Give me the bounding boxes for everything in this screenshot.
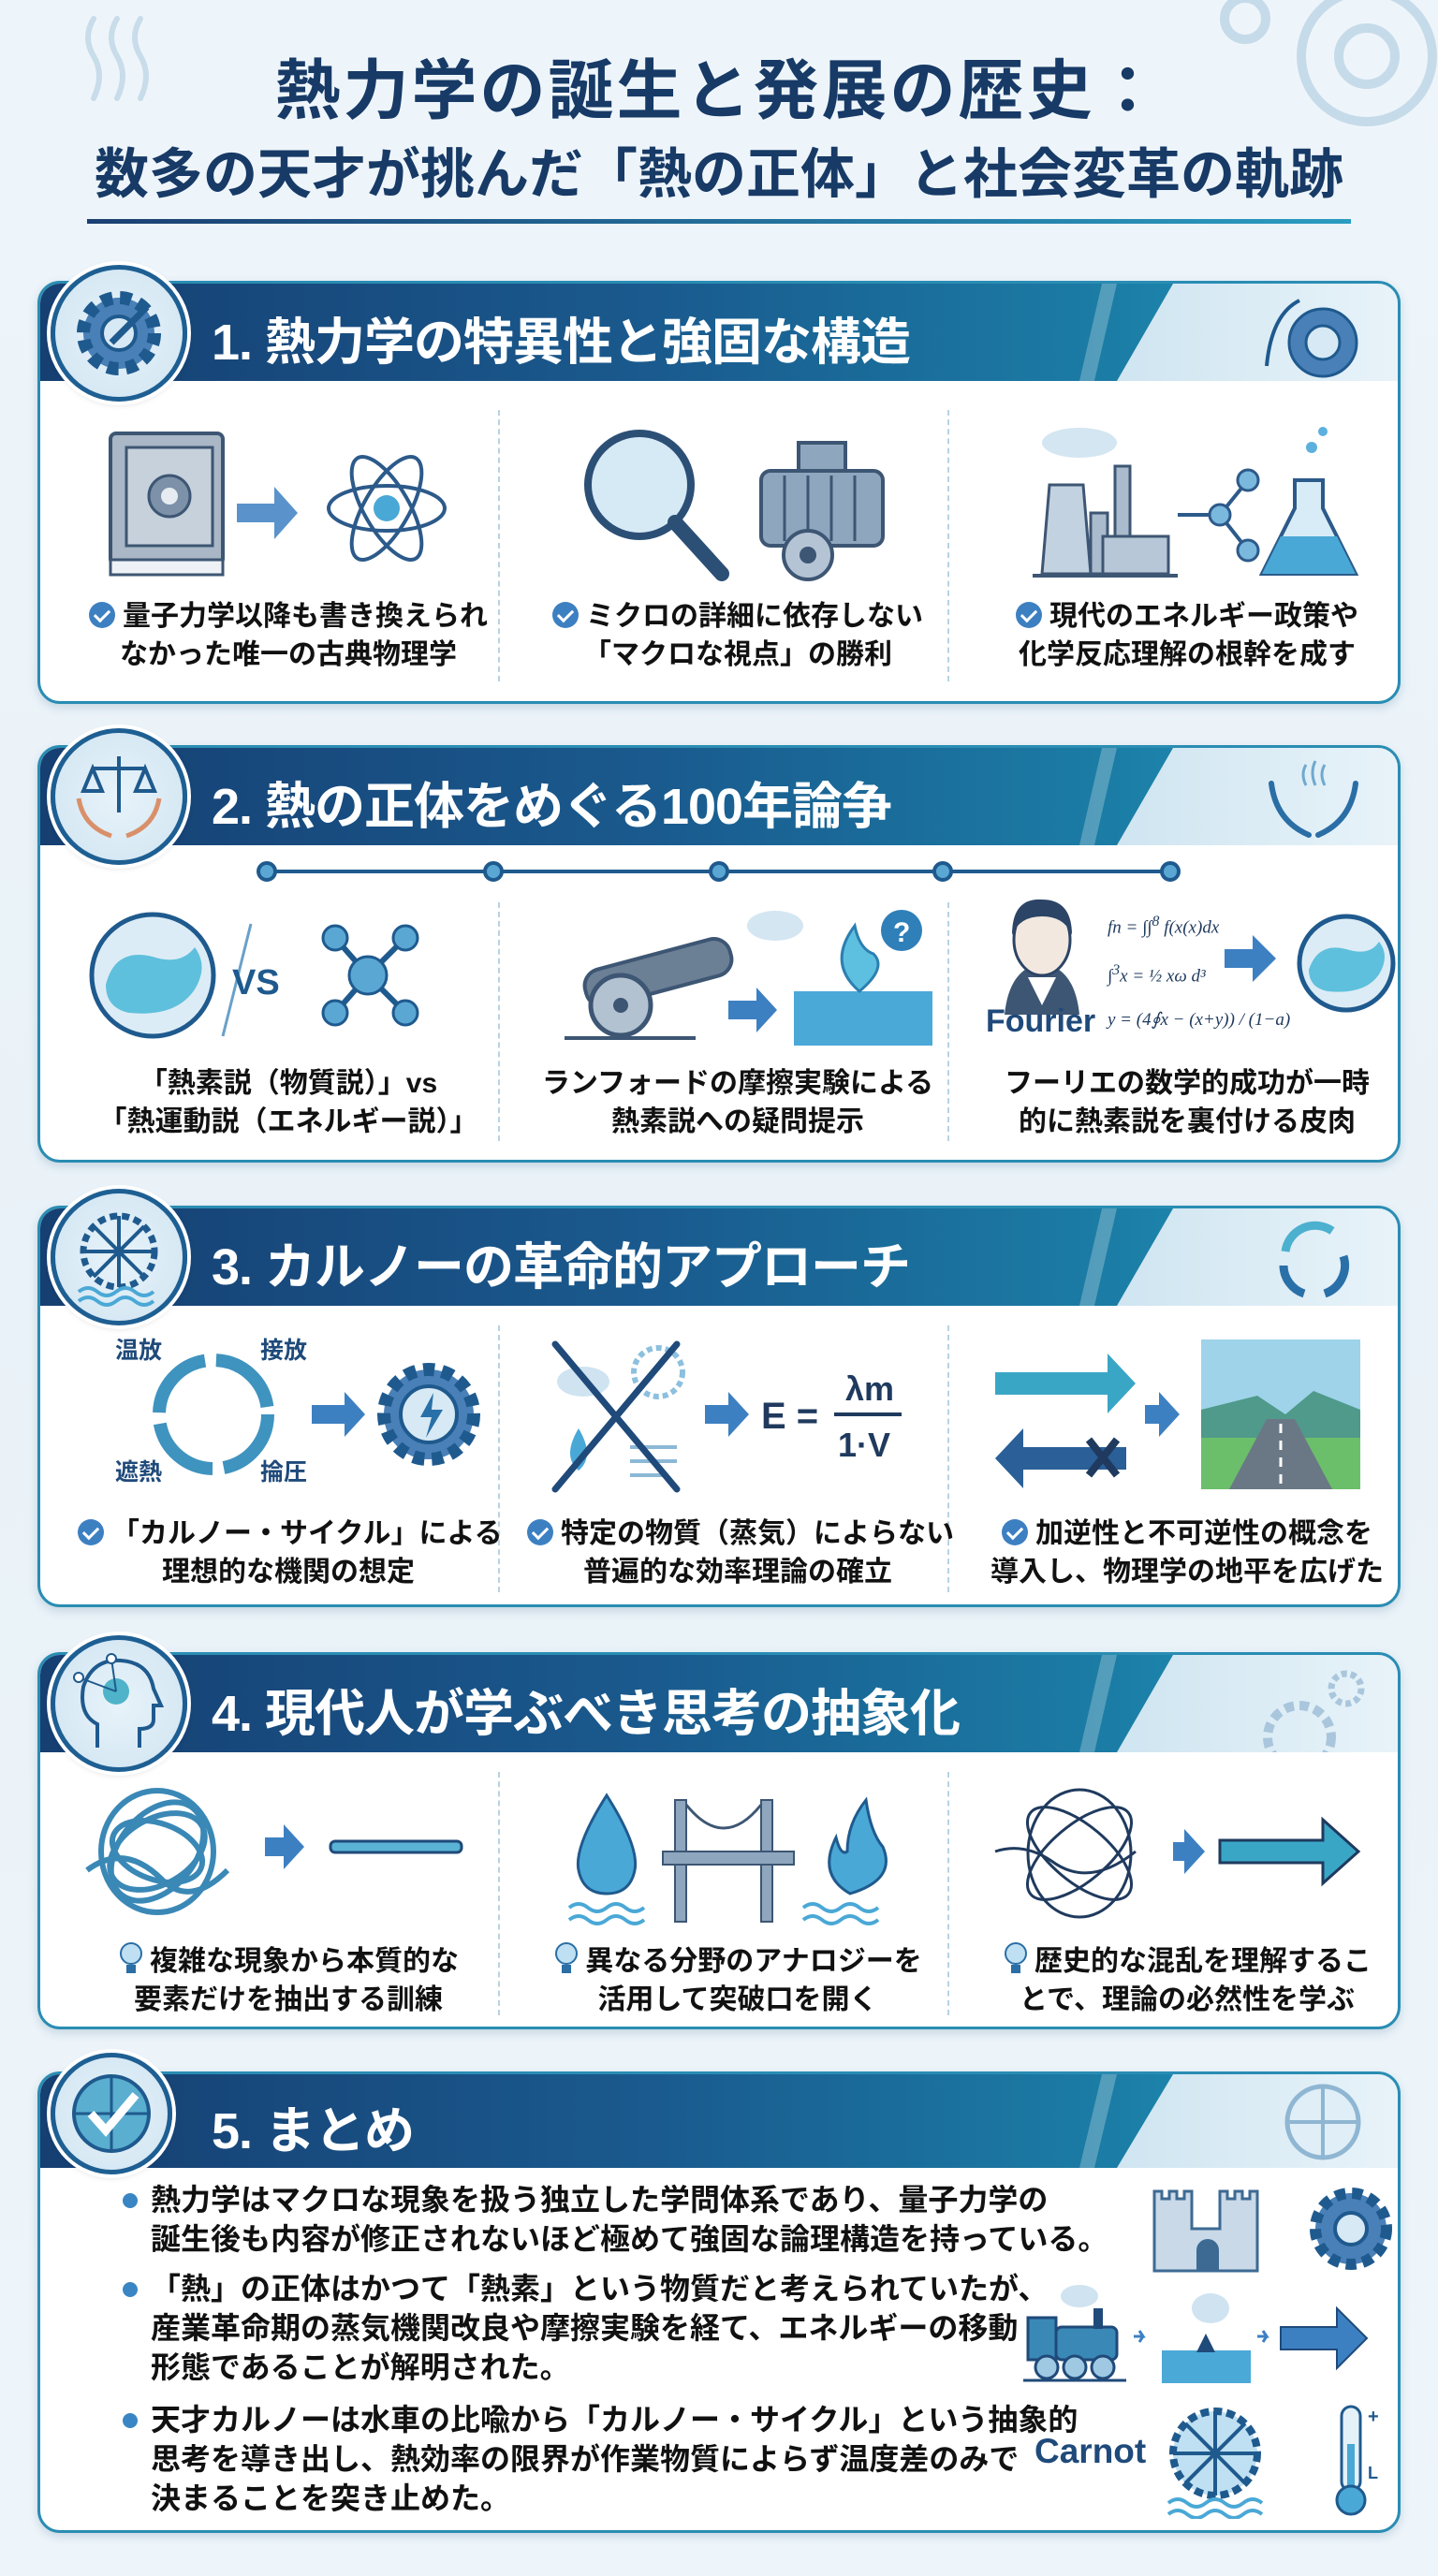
timeline [257,861,1181,882]
header 1: 1. 熱力学の特異性と強固な構造 [212,315,910,371]
col3 text [1005,1942,1372,2015]
title: 熱力学の誕生と発展の歴史： [275,54,1163,127]
col1 text [89,601,488,670]
panel 2 [37,745,1401,1163]
col3 icons: Fourier, formulas, caloric: fn = ∫∫8 f(x(x)dx [1108,914,1219,937]
col2 text [552,601,923,670]
header 2 [40,748,1398,845]
title: 数多の天才が挑んだ「熱の正体」と社会変革の軌跡 [95,144,1343,205]
col1 text: 量子力学以降も書き換えられ [123,601,488,632]
col3 text: 化学反応理解の根幹を成す [1019,639,1356,670]
col3 text [1016,601,1358,670]
panel 3 [37,1206,1401,1607]
icon: panel 3 waterwheel circle [51,1189,187,1325]
col1 text [78,1518,503,1588]
title underline [87,219,1351,224]
col2 text: 異なる分野のアナロジーを [585,1946,922,1977]
col1 icons: book -> atom [109,432,447,577]
col2 text: ミクロの詳細に依存しない [586,601,923,632]
col2 icons: cannon, fire, water [565,910,932,1046]
col3 icons: Fourier, formulas, caloric: y = (4∮x − (x+y)) / (1−a) [1108,1010,1290,1030]
col1 text: 複雑な現象から本質的な [150,1946,459,1977]
bullet 3: 思考を導き出し、熱効率の限界が作業物質によらず温度差のみで [151,2442,1019,2476]
col1 icons: caloric vs molecule [90,912,419,1039]
col3 icons: reversible arrows -> road landscape [995,1339,1360,1489]
bullet 2: 形態であることが解明された。 [151,2350,570,2384]
icon: puzzle circle (deco) [1284,2084,1361,2160]
bullet 3: 天才カルノーは水車の比喩から「カルノー・サイクル」という抽象的 [151,2403,1078,2437]
col3 icons: Fourier, formulas, caloric: Fourier [986,1003,1095,1039]
col1 text [120,1942,459,2015]
bullet 1: 熱力学はマクロな現象を扱う独立した学問体系であり、量子力学の [151,2183,1048,2217]
background decoration: gears [1220,0,1437,126]
col3 text: 的に熱素説を裏付ける皮肉 [1019,1106,1356,1137]
icons: castle and gear [1153,2188,1392,2273]
col1 icons: tangle -> line [85,1788,462,1915]
col3 text [990,1518,1384,1588]
col1 text [99,1068,477,1137]
icons: waterwheel and thermometer [1167,2406,1379,2519]
col3 icons: factory, molecule, flask [1033,427,1359,578]
header 4: 4. 現代人が学ぶべき思考の抽象化 [212,1686,960,1742]
col2 icons: crossed substances -> formula [552,1340,902,1492]
col1 text: なかった唯一の古典物理学 [120,639,457,670]
panel 5 [37,2071,1401,2533]
col2 icons: cannon, fire, water: ? [893,917,910,948]
header 3: 3. カルノーの革命的アプローチ [212,1239,910,1295]
panel 4 [37,1652,1401,2029]
Carnot label: Carnot [1034,2432,1146,2470]
col3 text: 加逆性と不可逆性の概念を [1035,1518,1372,1549]
col3 icons: tangle -> arrow [994,1788,1361,1919]
col2 text: ランフォードの摩擦実験による [542,1068,933,1099]
col1 text: 理想的な機関の想定 [162,1557,415,1588]
icon: hands with steam (deco) [1269,760,1358,838]
col1 text: 「熱素説（物質説）」vs [139,1068,437,1099]
header 1 [40,284,1398,381]
panel 1 [37,281,1401,704]
col2 text [542,1068,933,1137]
background decoration: steam lines [85,16,149,101]
bullet 3: 決まることを突き止めた。 [151,2481,510,2515]
col3 text: 歴史的な混乱を理解するこ [1034,1946,1372,1977]
title [95,54,1343,205]
bullet 2: 「熱」の正体はかつて「熱素」という物質だと考えられていたが、 [151,2272,1048,2305]
icon: panel 4 head circle [51,1635,187,1772]
col1 text: 「カルノー・サイクル」による [111,1518,503,1549]
col2 text: 特定の物質（蒸気）によらない [561,1518,954,1549]
col3 text: とで、理論の必然性を学ぶ [1020,1984,1355,2015]
col1 icons: caloric vs molecule: VS [232,963,280,1003]
bullet 1: 誕生後も内容が修正されないほど極めて強固な論理構造を持っている。 [151,2222,1108,2256]
col1 icons: carnot cycle -> gear: 遮熱 [115,1454,162,1487]
col3 text: フーリエの数学的成功が一時 [1005,1068,1370,1099]
header 5 [40,2074,1398,2168]
icons: train, steam, arrows [1023,2285,1369,2383]
col2 text: 熱素説への疑問提示 [611,1106,864,1137]
col3 icons: Fourier, formulas, caloric [986,899,1395,1039]
header 4 [40,1655,1398,1752]
col2 icons: magnifier + motor [584,430,885,581]
icon: panel 2 scales circle [51,728,187,865]
header 2: 2. 熱の正体をめぐる100年論争 [212,779,891,835]
col3 icons: Fourier, formulas, caloric: ∫3x = ½ xω d³ [1108,962,1206,987]
icon: panel 5 check puzzle circle [51,2053,172,2174]
col1 icons: carnot cycle -> gear [115,1332,480,1487]
header 3 [40,1208,1398,1306]
col1 icons: carnot cycle -> gear: 接放 [260,1332,307,1366]
icons: waterwheel and thermometer: L [1368,2464,1378,2482]
col2 icons: drop, bridge, flame [567,1793,888,1925]
col2 icons: crossed substances -> formula: E = [761,1396,818,1437]
col1 text: 要素だけを抽出する訓練 [134,1984,443,2015]
col1 icons: carnot cycle -> gear: 温放 [115,1332,162,1366]
icon: panel 1 gear circle [51,265,187,402]
col2 text [527,1518,954,1588]
col3 text [1005,1067,1370,1137]
col2 text: 活用して突破口を開く [597,1984,878,2015]
col2 text: 普遍的な効率理論の確立 [583,1557,892,1588]
col2 icons: crossed substances -> formula: λm [845,1369,894,1408]
col3 text: 現代のエネルギー政策や [1049,601,1358,632]
icon: gear with arrow (deco) [1265,299,1357,378]
bullet 2 [123,2272,1048,2384]
col2 text [555,1942,922,2015]
col2 icons: crossed substances -> formula: 1·V [838,1426,890,1464]
icon: cycle arrows (deco) [1279,1221,1350,1297]
col1 icons: carnot cycle -> gear: 掄圧 [260,1454,307,1487]
icons: waterwheel and thermometer: + [1368,2407,1379,2427]
bullet 1 [123,2183,1108,2256]
col3 text: 導入し、物理学の地平を広げた [990,1557,1384,1588]
bullet 2: 産業革命期の蒸気機関改良や摩擦実験を経て、エネルギーの移動 [151,2311,1018,2345]
header 5: 5. まとめ [212,2103,414,2159]
bullet 3 [123,2403,1078,2515]
col2 text: 「マクロな視点」の勝利 [583,639,892,670]
icon: gears (deco) [1263,1670,1365,1752]
col1 text: 「熱運動説（エネルギー説）」 [99,1106,477,1137]
